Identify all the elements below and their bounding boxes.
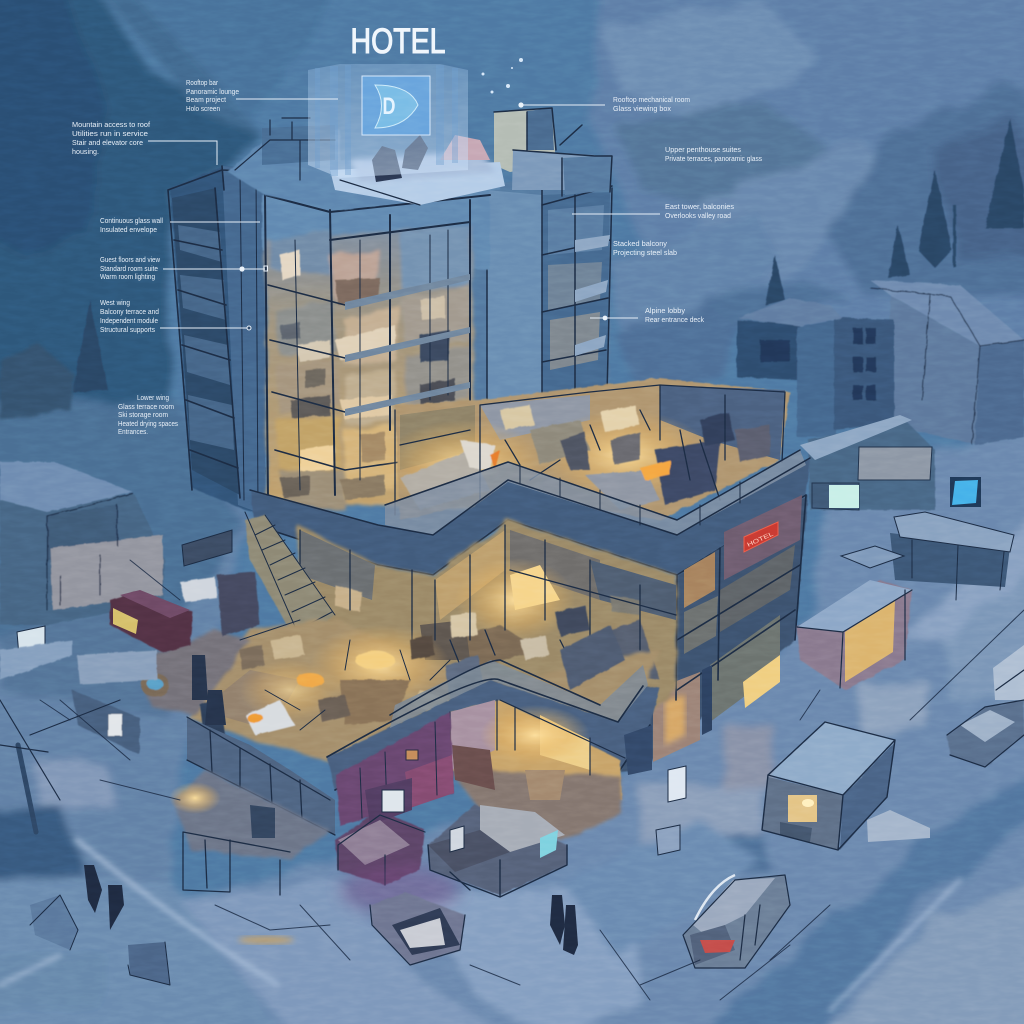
label: west wing: Balcony terrace and: [100, 309, 159, 316]
label: plant room: [613, 97, 690, 113]
lower left seating area: [169, 770, 330, 895]
curved lower balcony: [327, 660, 660, 790]
upper terrace bedrooms: [380, 378, 790, 520]
label: service core: Utilities run in service: [72, 131, 148, 138]
left market: red cabin: [110, 590, 193, 652]
label: plant room: Glass viewing box: [613, 106, 672, 113]
tower frame and slabs: [265, 195, 490, 500]
label: west wing: Structural supports: [100, 327, 155, 334]
rooftop people: [372, 135, 428, 182]
label: west wing: [100, 300, 159, 334]
label: lower wing: Entrances.: [118, 429, 148, 436]
tower interior rooms: [266, 225, 475, 510]
label: east tower: Overlooks valley road: [665, 213, 731, 220]
label: service core: [72, 122, 150, 156]
label: west wing: West wing: [100, 300, 130, 307]
trailer: [762, 722, 895, 850]
roadside kiosk: [841, 512, 1014, 600]
hologram screen: [362, 76, 430, 135]
guests: [192, 655, 226, 725]
left background buildings: [0, 345, 232, 625]
label: glass envelope: Continuous glass wall: [100, 218, 163, 225]
label: lower floors: Rear entrance deck: [645, 317, 704, 324]
label: service core: Mountain access to roof: [72, 122, 150, 129]
label: glass envelope: [100, 218, 163, 234]
distant buildings on the right: [737, 280, 1024, 600]
left market: stalls: [0, 572, 260, 755]
label: guest floors: [100, 257, 161, 281]
red neon sign: [744, 522, 778, 552]
roof plant room: [494, 108, 612, 196]
lounge clutter: [335, 585, 640, 660]
label: lower wing: Heated drying spaces: [118, 421, 178, 428]
building: dark apartment block: [737, 298, 894, 437]
foreground car: [683, 875, 790, 968]
label: service core: housing.: [72, 149, 99, 156]
furniture details: [280, 250, 470, 500]
trees on the right slope: [72, 118, 1024, 392]
label: rooftop projection: Rooftop bar: [186, 80, 219, 87]
label: glass envelope: Insulated envelope: [100, 227, 157, 234]
purple wall: [336, 712, 454, 826]
blue screen: [950, 477, 981, 507]
left wing of the tower: [168, 166, 266, 515]
building: left lit house: [0, 462, 165, 625]
label: lower floors: Alpine lobby: [645, 308, 686, 315]
roadside shop: [797, 580, 912, 690]
low utility cart: [370, 892, 465, 965]
parked cars at right: [947, 645, 1024, 767]
label: rooftop projection: Holo screen: [186, 106, 220, 113]
label: upper suites: Private terraces, panoramic glass: [665, 156, 762, 163]
building: far left dark house: [0, 345, 75, 420]
lower purple glow: [340, 865, 460, 915]
label: service core: Stair and elevator core: [72, 140, 143, 147]
label: balcony stack: [613, 241, 677, 257]
label: guest floors: Guest floors and view: [100, 257, 161, 264]
left deck railing: [187, 717, 335, 835]
tables and chairs: [141, 625, 625, 745]
roof deck: [228, 118, 505, 210]
upper balcony band: [250, 450, 810, 575]
left market: screen: [17, 626, 45, 656]
pillars and right wall: [624, 665, 712, 775]
label: west wing: Independent module: [100, 318, 158, 325]
right facade: [600, 495, 808, 772]
right glass tower: [470, 180, 612, 410]
main tower body: [262, 188, 490, 510]
label: rooftop projection: Panoramic lounge: [186, 89, 239, 96]
sketch lines in the snow: [40, 560, 1024, 1000]
label: lower floors: [645, 308, 704, 324]
label: plant room: Rooftop mechanical room: [613, 97, 690, 104]
beds: [400, 405, 770, 510]
slab highlights: [345, 274, 470, 416]
ground floor cafe: [450, 700, 625, 840]
label: lower wing: [118, 395, 178, 436]
pedestrians: [84, 865, 578, 955]
label: balcony stack: Projecting steel slab: [613, 250, 677, 257]
snow-buried small car: [867, 810, 930, 842]
label: rooftop projection: Beam project: [186, 97, 226, 104]
foreground rocks in the snow: [30, 895, 170, 985]
label: east tower: [665, 204, 735, 220]
parked van: [428, 805, 567, 897]
facade windows: [600, 545, 795, 762]
title: HOTEL: [350, 22, 446, 61]
snow streaks: [0, 840, 960, 1010]
label: rooftop projection: [186, 80, 239, 113]
roadside signboards: [450, 766, 686, 855]
label: lower wing: Ski storage room: [118, 412, 168, 419]
hologram stripes: [315, 65, 458, 176]
balconies: [575, 235, 610, 356]
label: guest floors: Warm room lighting: [100, 274, 155, 281]
hologram screen: D: [382, 93, 396, 120]
label: upper suites: [665, 147, 762, 163]
sign near stairs: [182, 530, 232, 566]
red neon sign: HOTEL: [747, 531, 775, 549]
second floor lounge: [298, 520, 677, 720]
label: lower wing: Glass terrace room: [118, 404, 174, 411]
building: large pale house: [870, 280, 1024, 445]
sparkles near hologram: [482, 58, 523, 94]
shop sign house: [800, 415, 935, 510]
label: guest floors: Standard room suite: [100, 266, 158, 273]
orange light on snow: [238, 936, 294, 944]
label: east tower: East tower, balconies: [665, 204, 735, 211]
label: lower wing: Lower wing: [137, 395, 169, 402]
leader lines: [148, 99, 660, 330]
label: balcony stack: Stacked balcony: [613, 241, 668, 248]
tower glass upper: [262, 188, 490, 270]
first floor terrace: [140, 620, 660, 760]
hologram projection: [308, 64, 468, 178]
background: snowy ground: [0, 400, 1024, 1024]
staircase: [245, 512, 335, 648]
purple kiosk machine: [335, 778, 425, 885]
label: upper suites: Upper penthouse suites: [665, 147, 742, 154]
utility pole: [0, 700, 120, 832]
